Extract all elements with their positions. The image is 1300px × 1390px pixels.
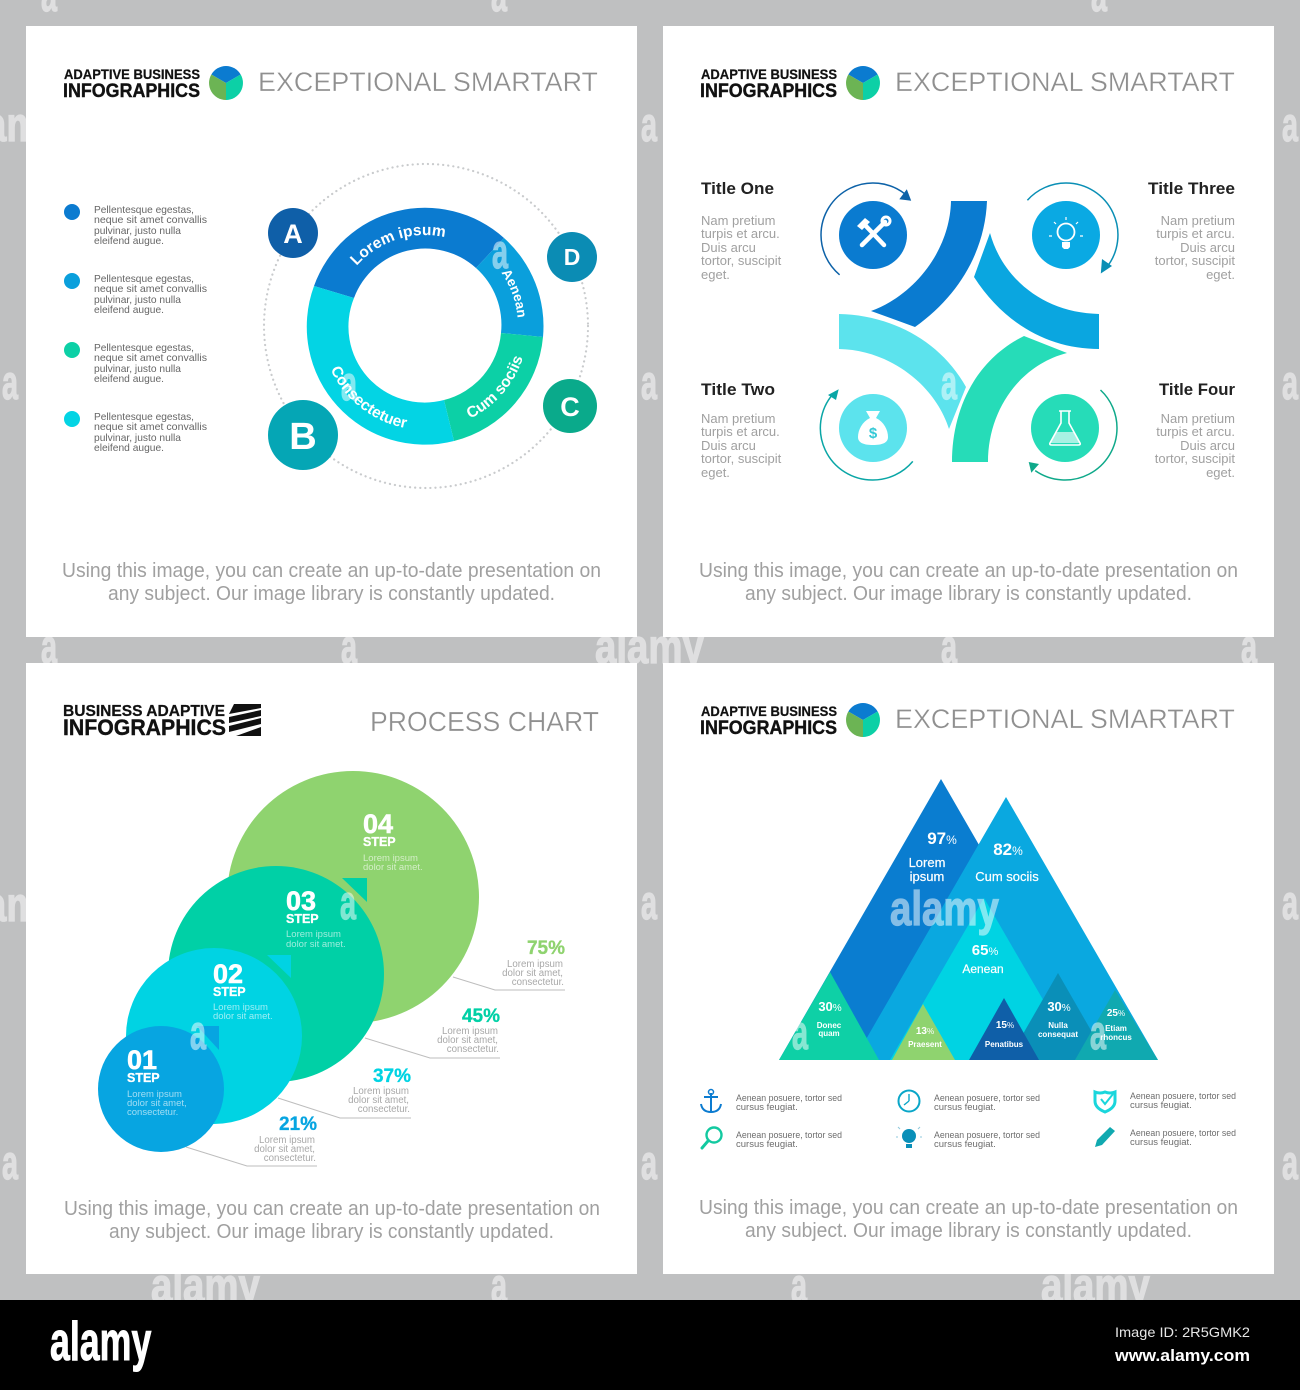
step 04 circle: 04 <box>363 809 393 839</box>
text block: title two: eget. <box>701 465 730 480</box>
callout 21%: dolor sit amet, <box>254 1144 315 1155</box>
dotted orbit circle <box>264 164 588 488</box>
caption: Using this image, you can create an up-to-date presentation on <box>62 560 601 582</box>
donut chart: Consectetuer <box>332 366 408 428</box>
legend list: eleifend augue. <box>94 235 164 247</box>
text block: title four: Nam pretium <box>1161 411 1235 426</box>
watermarks: a <box>1241 621 1258 674</box>
badge C: C <box>560 392 580 422</box>
legend: shield: Aenean posuere, tortor sed <box>1130 1091 1236 1102</box>
legend: shield <box>1095 1091 1236 1112</box>
step 03 circle with arrow: 03 <box>286 886 316 916</box>
watermarks: a <box>641 99 658 152</box>
legend list: neque sit amet convallis <box>94 352 207 364</box>
legend: pencil <box>1095 1127 1236 1148</box>
legend: magnifier: Aenean posuere, tortor sed <box>736 1130 842 1141</box>
legend list: Pellentesque egestas, <box>94 204 194 216</box>
step 03 circle with arrow: dolor sit amet. <box>286 939 346 950</box>
step 01 circle with arrow: 01 <box>127 1045 157 1075</box>
step 01 circle with arrow: consectetur. <box>127 1107 178 1118</box>
text block: title two: Title Two <box>701 381 775 399</box>
heading: business adaptive infographics logo: BUSINESS ADAPTIVE <box>63 703 225 720</box>
heading: adaptive business infographics logo: INFOGRAPHICS <box>700 718 837 739</box>
mountain triangle chart: 13% <box>916 1026 934 1037</box>
legend: light bulb: cursus feugiat. <box>934 1139 996 1150</box>
callout 37%: consectetur. <box>358 1104 410 1115</box>
icon: tri-colour pie logo <box>209 66 243 100</box>
panel: donut chart slide <box>26 26 637 637</box>
callout 75%: dolor sit amet, <box>502 968 563 979</box>
step 03 circle with arrow: STEP <box>286 912 319 926</box>
callout 45%: consectetur. <box>447 1044 499 1055</box>
mountain triangle chart: rhoncus <box>1100 1033 1132 1042</box>
donut chart: Lorem ipsum <box>350 226 445 266</box>
callout 37% <box>348 1066 411 1115</box>
watermarks: a <box>190 1007 207 1060</box>
step 02 circle with arrow <box>126 948 302 1124</box>
legend: light bulb <box>896 1127 1040 1150</box>
icon: flask with circular arrow <box>1029 390 1117 480</box>
legend: pencil: Aenean posuere, tortor sed <box>1130 1128 1236 1139</box>
watermarks: alamy <box>1041 1260 1150 1313</box>
watermarks: a <box>1090 1007 1107 1060</box>
watermarks: a <box>792 1007 809 1060</box>
icon: striped flag logo <box>229 704 261 736</box>
text block: title one: Title One <box>701 180 774 198</box>
mountain triangle chart: Praesent <box>908 1040 942 1049</box>
legend: clock: Aenean posuere, tortor sed <box>934 1093 1040 1104</box>
mountain triangle chart: Etiam <box>1105 1024 1127 1033</box>
legend list: eleifend augue. <box>94 373 164 385</box>
legend list: pulvinar, justo nulla <box>94 363 181 375</box>
callout 37%: 37% <box>373 1066 411 1087</box>
legend: shield: cursus feugiat. <box>1130 1100 1192 1111</box>
panel: process chart slide <box>26 663 637 1274</box>
legend: clock <box>898 1090 1040 1113</box>
watermarks: a <box>791 1260 808 1313</box>
mountain triangle chart: quam <box>818 1029 840 1038</box>
legend list: eleifend augue. <box>94 442 164 454</box>
badge A <box>268 208 318 258</box>
text block: title three: Nam pretium <box>1161 213 1235 228</box>
text block: title three: Duis arcu <box>1180 240 1235 255</box>
step 02 circle with arrow: dolor sit amet. <box>213 1011 273 1022</box>
watermarks: a <box>1282 877 1299 930</box>
legend: anchor: cursus feugiat. <box>736 1102 798 1113</box>
donut chart: Cum sociis <box>467 356 522 417</box>
text block: title two: Nam pretium <box>701 411 775 426</box>
caption: Using this image, you can create an up-to-date presentation on <box>699 1197 1238 1219</box>
text block: title four <box>1155 381 1236 480</box>
heading: adaptive business infographics logo: INFOGRAPHICS <box>700 81 837 102</box>
badge A: A <box>283 219 303 249</box>
step 02 circle with arrow: 02 <box>213 959 243 989</box>
text block: title one: turpis et arcu. <box>701 226 780 241</box>
icon: tri-colour pie logo <box>846 703 880 737</box>
heading: adaptive business infographics logo <box>700 66 837 102</box>
watermarks: a <box>941 621 958 674</box>
title: EXCEPTIONAL SMARTART <box>258 67 598 97</box>
mountain triangle chart: Lorem <box>909 855 945 870</box>
legend list: pulvinar, justo nulla <box>94 432 181 444</box>
legend: magnifier <box>702 1128 842 1150</box>
text block: title two: tortor, suscipit <box>701 451 782 466</box>
text block: title three: tortor, suscipit <box>1155 253 1235 268</box>
mountain triangle chart: ipsum <box>910 869 944 884</box>
heading: adaptive business infographics logo <box>63 66 200 102</box>
heading: adaptive business infographics logo: ADAPTIVE BUSINESS <box>701 66 837 82</box>
caption <box>62 560 601 605</box>
title: EXCEPTIONAL SMARTART <box>895 704 1235 734</box>
step 04 circle: dolor sit amet. <box>363 862 423 873</box>
legend: clock: cursus feugiat. <box>934 1102 996 1113</box>
mountain triangle chart: 25% <box>1107 1008 1125 1019</box>
step 02 circle with arrow: STEP <box>213 985 246 999</box>
legend list: pulvinar, justo nulla <box>94 225 181 237</box>
mountain triangle chart <box>779 779 1158 1060</box>
watermarks: alamy <box>151 1260 260 1313</box>
heading: adaptive business infographics logo <box>700 703 837 739</box>
step 04 circle <box>227 771 479 1023</box>
caption <box>64 1198 600 1243</box>
step 01 circle with arrow <box>98 1026 224 1152</box>
legend: magnifier: cursus feugiat. <box>736 1139 798 1150</box>
legend: pencil: cursus feugiat. <box>1130 1137 1192 1148</box>
title: PROCESS CHART <box>370 706 599 737</box>
mountain triangle chart: Nulla <box>1048 1021 1068 1030</box>
watermarks: a <box>1282 99 1299 152</box>
footer bar <box>0 1300 1300 1390</box>
callout 75%: 75% <box>527 938 565 959</box>
mountain triangle chart: 30% <box>818 999 842 1014</box>
watermarks: a <box>2 357 19 410</box>
watermarks: a <box>492 226 509 279</box>
watermarks: a <box>2 1137 19 1190</box>
legend list: Pellentesque egestas, <box>94 342 194 354</box>
step 01 circle with arrow: dolor sit amet, <box>127 1098 187 1109</box>
text block: title four: tortor, suscipit <box>1155 451 1235 466</box>
text block: title one: Duis arcu <box>701 240 756 255</box>
footer bar: Image ID: 2R5GMK2 <box>1115 1324 1250 1340</box>
callout 75%: Lorem ipsum <box>507 959 563 970</box>
legend list: Pellentesque egestas, <box>94 273 194 285</box>
panel: four arcs slide <box>663 26 1274 637</box>
watermarks: a <box>341 621 358 674</box>
watermarks: a <box>340 877 357 930</box>
callout 21%: Lorem ipsum <box>259 1135 315 1146</box>
watermarks: alamy <box>595 621 704 674</box>
caption <box>699 560 1238 605</box>
text block: title three: Title Three <box>1148 180 1235 198</box>
panel: triangle chart slide <box>663 663 1274 1274</box>
icon: money bag with circular arrow: $ <box>869 425 878 442</box>
callout 45%: dolor sit amet, <box>437 1035 498 1046</box>
badge C <box>543 379 597 433</box>
badge B <box>268 400 338 470</box>
callout 45%: Lorem ipsum <box>442 1026 498 1037</box>
step 04 circle: STEP <box>363 835 396 849</box>
legend list: neque sit amet convallis <box>94 214 207 226</box>
callout 21% <box>254 1114 317 1164</box>
mountain triangle chart: 15% <box>996 1020 1014 1031</box>
mountain triangle chart: Aenean <box>962 962 1004 976</box>
leader lines <box>186 977 565 1166</box>
heading: adaptive business infographics logo: ADAPTIVE BUSINESS <box>64 66 200 82</box>
watermarks: a <box>641 1137 658 1190</box>
mountain triangle chart: 97% <box>927 829 957 848</box>
mountain triangle chart: 65% <box>972 942 998 959</box>
legend list: neque sit amet convallis <box>94 283 207 295</box>
legend: light bulb: Aenean posuere, tortor sed <box>934 1130 1040 1141</box>
text block: title four: Duis arcu <box>1180 438 1235 453</box>
watermarks: a <box>641 357 658 410</box>
watermarks: a <box>491 1260 508 1313</box>
mountain triangle chart: 82% <box>993 840 1023 859</box>
legend list: eleifend augue. <box>94 304 164 316</box>
callout 21%: consectetur. <box>264 1153 316 1164</box>
text block: title one: Nam pretium <box>701 213 775 228</box>
legend list: pulvinar, justo nulla <box>94 294 181 306</box>
arc: light cyan bottom left <box>839 314 966 429</box>
icon: tri-colour pie logo <box>846 66 880 100</box>
arc: blue top left <box>871 201 987 327</box>
icon: money bag with circular arrow <box>820 389 913 480</box>
step 03 circle with arrow: Lorem ipsum <box>286 929 341 940</box>
legend: anchor <box>701 1090 842 1113</box>
step 03 circle with arrow <box>168 866 384 1082</box>
legend list: Pellentesque egestas, <box>94 411 194 423</box>
donut chart <box>306 208 544 445</box>
mountain triangle chart: 30% <box>1047 999 1071 1014</box>
caption: any subject. Our image library is constantly updated. <box>745 583 1192 605</box>
caption: any subject. Our image library is constantly updated. <box>108 583 555 605</box>
watermarks: a <box>41 621 58 674</box>
callout 75%: consectetur. <box>512 977 564 988</box>
caption: any subject. Our image library is constantly updated. <box>745 1220 1192 1242</box>
caption: any subject. Our image library is constantly updated. <box>109 1221 554 1243</box>
callout 21%: 21% <box>279 1114 317 1135</box>
watermarks: a <box>641 877 658 930</box>
text block: title three <box>1148 180 1235 282</box>
footer bar: www.alamy.com <box>1114 1346 1250 1365</box>
mountain triangle chart: Cum sociis <box>975 869 1039 884</box>
icon: light bulb with circular arrow <box>1027 183 1118 274</box>
text block: title three: turpis et arcu. <box>1156 226 1235 241</box>
badge B: B <box>289 416 317 458</box>
donut chart: Aenean <box>502 270 524 318</box>
text block: title one <box>701 180 782 282</box>
callout 45%: 45% <box>462 1006 500 1027</box>
footer bar: alamy <box>50 1310 152 1372</box>
text block: title two: turpis et arcu. <box>701 424 780 439</box>
title: EXCEPTIONAL SMARTART <box>895 67 1235 97</box>
arc: sky top right <box>974 233 1099 349</box>
caption: Using this image, you can create an up-to-date presentation on <box>699 560 1238 582</box>
callout 45% <box>437 1006 500 1055</box>
mountain triangle chart: Donec <box>817 1021 842 1030</box>
text block: title one: eget. <box>701 267 730 282</box>
legend: anchor: Aenean posuere, tortor sed <box>736 1093 842 1104</box>
heading: business adaptive infographics logo: INFOGRAPHICS <box>63 715 226 740</box>
step 01 circle with arrow: STEP <box>127 1071 160 1085</box>
watermarks: a <box>941 357 958 410</box>
watermarks: a <box>1282 357 1299 410</box>
callout 37%: dolor sit amet, <box>348 1095 409 1106</box>
caption <box>699 1197 1238 1242</box>
step 01 circle with arrow: Lorem ipsum <box>127 1089 182 1100</box>
heading: business adaptive infographics logo <box>63 703 226 740</box>
callout 75% <box>502 938 565 988</box>
watermarks: alamy <box>890 883 999 936</box>
heading: adaptive business infographics logo: ADAPTIVE BUSINESS <box>701 703 837 719</box>
step 02 circle with arrow: Lorem ipsum <box>213 1002 268 1013</box>
callout 37%: Lorem ipsum <box>353 1086 409 1097</box>
heading: adaptive business infographics logo: INFOGRAPHICS <box>63 81 200 102</box>
text block: title four: eget. <box>1206 465 1235 480</box>
caption: Using this image, you can create an up-to-date presentation on <box>64 1198 600 1220</box>
arc: teal bottom right <box>952 336 1067 462</box>
text block: title four: turpis et arcu. <box>1156 424 1235 439</box>
legend list: neque sit amet convallis <box>94 421 207 433</box>
icon: tools with circular arrow <box>821 183 911 275</box>
badge D <box>547 232 597 282</box>
legend list <box>64 204 207 454</box>
text block: title two: Duis arcu <box>701 438 756 453</box>
mountain triangle chart: consequat <box>1038 1030 1078 1039</box>
text block: title two <box>701 381 782 480</box>
text block: title one: tortor, suscipit <box>701 253 782 268</box>
text block: title four: Title Four <box>1159 381 1236 399</box>
step 04 circle: Lorem ipsum <box>363 853 418 864</box>
badge D: D <box>564 244 580 270</box>
mountain triangle chart: Penatibus <box>985 1040 1024 1049</box>
watermarks: a <box>1282 1137 1299 1190</box>
watermarks: a <box>341 358 358 411</box>
text block: title three: eget. <box>1206 267 1235 282</box>
